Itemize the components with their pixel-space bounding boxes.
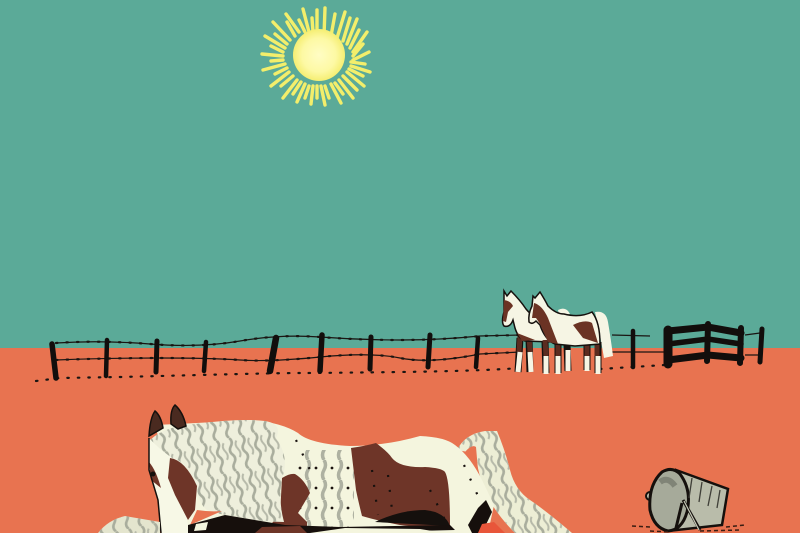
gate: dark wooden gate (668, 324, 762, 364)
pair of small horses (502, 291, 613, 374)
large horse: tail (457, 431, 572, 533)
large horse lying down (98, 405, 572, 533)
background: teal sky (0, 0, 800, 349)
icon: tipped-over bucket (646, 469, 728, 531)
large horse: mane (150, 420, 285, 522)
large horse: spine and flank speckles (296, 440, 482, 520)
fence: barbed wire and posts (36, 331, 760, 381)
small horse: background tail (595, 312, 613, 358)
small horse: right (529, 292, 600, 374)
small horse: left (502, 291, 552, 372)
large horse: ears (149, 405, 186, 436)
ground speckles under bucket (632, 525, 745, 532)
background: orange ground (0, 348, 800, 533)
large horse: saddle shadow (375, 510, 450, 526)
large horse: saddle patch (351, 443, 450, 527)
large horse: ribs (298, 450, 354, 528)
large horse: shoulder patch (262, 474, 310, 533)
large horse: foreleg and belly shadow (188, 500, 505, 533)
icon: sun (262, 8, 370, 105)
large horse: hoof feathering (98, 516, 160, 533)
large horse: body (155, 420, 494, 533)
large horse: head (149, 438, 197, 533)
